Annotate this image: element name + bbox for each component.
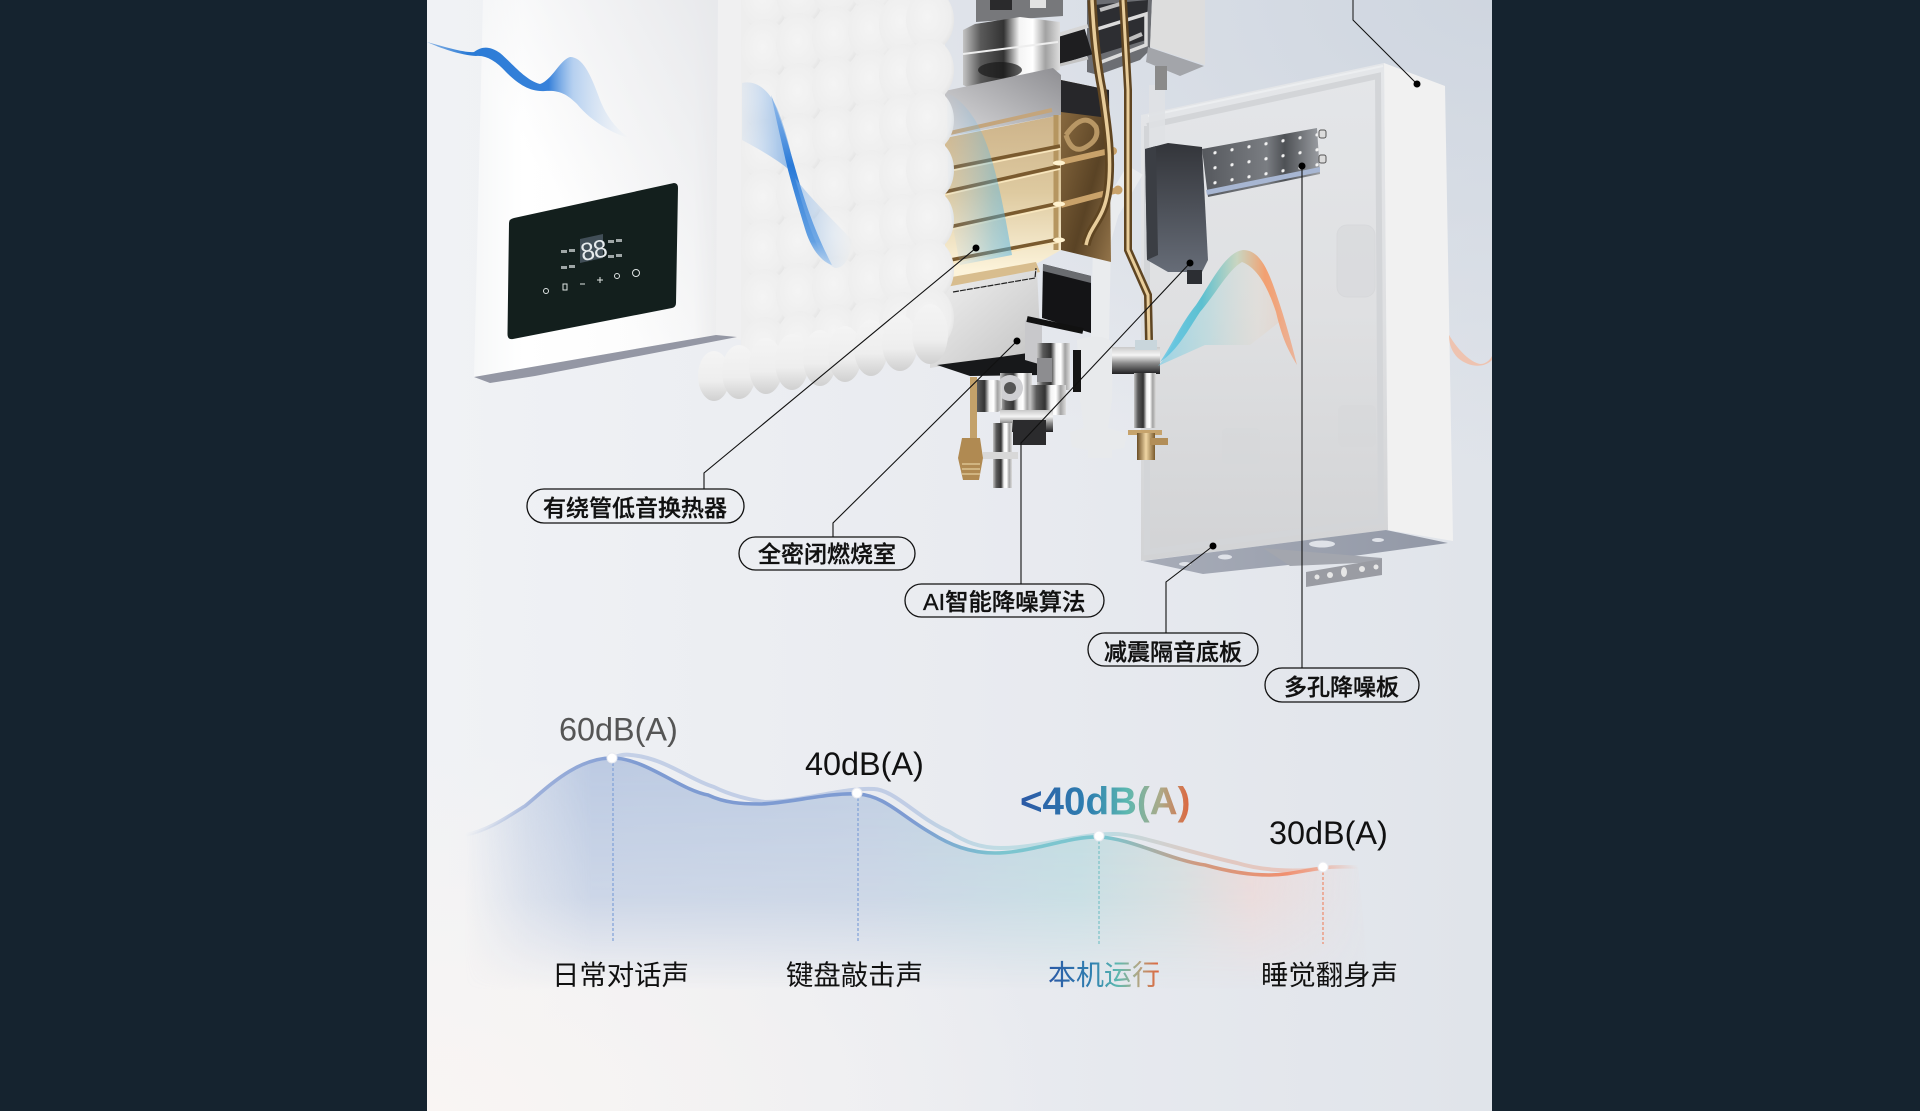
callout: 减震隔音底板: 减震隔音底板	[1104, 639, 1242, 665]
callout: AI智能降噪算法: AI智能降噪算法	[923, 589, 1085, 615]
callout: 全密闭燃烧室	[739, 338, 1020, 570]
chrome cylinder	[963, 17, 1060, 88]
label: 本机运行: 本机运行	[1048, 960, 1160, 990]
callout: 减震隔音底板	[1088, 542, 1258, 666]
sound wave: blue, blanket	[742, 82, 852, 268]
main curve	[465, 758, 1358, 875]
panel: page background	[427, 0, 1492, 1111]
heat exchanger	[935, 68, 1122, 292]
label: 睡觉翻身声: 睡觉翻身声	[1261, 960, 1398, 990]
callout: 有绕管低音换热器: 有绕管低音换热器	[543, 495, 727, 521]
sound wave: blue cyan, heat exchanger	[947, 93, 1012, 265]
perforated noise reduction bar	[1202, 128, 1326, 197]
left chrome tube	[972, 380, 1002, 412]
right valve	[1112, 347, 1160, 374]
echo curve	[612, 755, 1323, 870]
white translucent pipe	[1070, 85, 1165, 458]
side	[1061, 80, 1111, 262]
gray top	[940, 68, 1061, 138]
value: <40dB(A): <40dB(A)	[1020, 780, 1190, 824]
translucent back panel	[1141, 63, 1388, 561]
label: 日常对话声: 日常对话声	[552, 960, 689, 990]
white cover	[1150, 0, 1205, 65]
value: 60dB(A): 60dB(A)	[559, 712, 678, 748]
callout: 多孔降噪板: 多孔降噪板	[1284, 674, 1399, 700]
bottom mounting plate	[1143, 530, 1448, 574]
value: 40dB(A): 40dB(A)	[805, 746, 924, 782]
control display: 88	[578, 235, 609, 267]
gold water pipes	[1086, 0, 1149, 340]
top parts	[976, 0, 1063, 22]
gas valve assembly	[958, 319, 1168, 488]
value: 30dB(A): 30dB(A)	[1269, 815, 1388, 851]
gold left fitting	[970, 377, 977, 439]
control display	[508, 183, 678, 339]
front cover panel	[474, 0, 741, 383]
bottom puffs	[698, 304, 948, 401]
chrome connector frame	[1087, 0, 1152, 75]
sound wave: blue, front panel	[427, 42, 632, 139]
callout: 多孔降噪板	[1265, 162, 1419, 702]
chart area fill	[482, 760, 1316, 972]
elbow	[1048, 40, 1088, 52]
gold front	[935, 115, 1061, 280]
short stub	[1155, 66, 1167, 90]
sound wave: multi colour, back panel	[1158, 250, 1297, 366]
noise level chart	[465, 712, 1398, 990]
white side panel	[1384, 63, 1453, 541]
rear mounting box	[1141, 63, 1453, 587]
dashed drop lines	[613, 758, 1323, 944]
upper burner unit	[963, 0, 1205, 90]
fan box	[1145, 143, 1208, 284]
callout: 全密闭燃烧室: 全密闭燃烧室	[758, 541, 896, 567]
label: 键盘敲击声: 键盘敲击声	[786, 960, 923, 990]
combustion chamber body	[930, 264, 1091, 376]
sound wave: orange tail	[1449, 335, 1492, 366]
callout: AI智能降噪算法	[905, 260, 1194, 617]
lower chrome outlet	[993, 423, 1012, 488]
sound insulation blanket	[698, 0, 954, 401]
lower bracket	[1306, 559, 1382, 587]
callout: top right leader	[1353, 0, 1420, 88]
callout: 有绕管低音换热器	[527, 244, 980, 523]
data points	[607, 753, 1328, 872]
